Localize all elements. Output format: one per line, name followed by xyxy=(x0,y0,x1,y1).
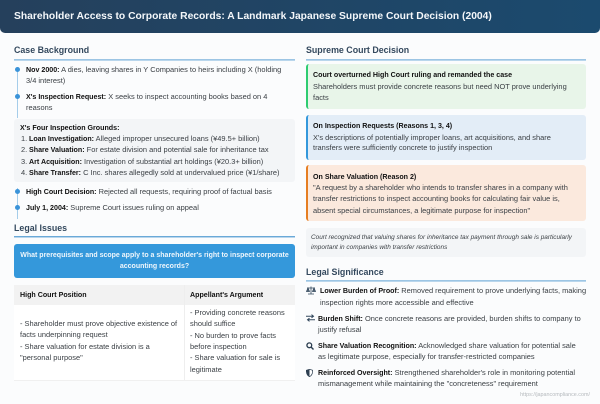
significance: burden shift: Burden Shift: Once concrete reasons are provided, burden shifts to company to xyxy=(318,314,581,322)
significance: lower burden: Lower Burden of Proof: Removed requirement to prove underlying facts, making xyxy=(320,286,586,295)
High Court position text: - Share valuation for estate division is a xyxy=(20,342,150,350)
grounds heading: X's Four Inspection Grounds: xyxy=(20,124,119,132)
ground 3: Art Acquisition: Investigation of substantial art holdings (¥20.3+ billion) xyxy=(29,156,263,166)
significance: burden shift xyxy=(318,314,581,334)
significance: share valuation recognition xyxy=(318,341,576,361)
timeline entry: Nov 2000: 3/4 interest) xyxy=(26,76,65,85)
timeline entry: inspection request xyxy=(26,92,268,112)
title banner xyxy=(0,0,600,33)
timeline entry: inspection request: X's Inspection Request: X seeks to inspect accounting books based on 4 xyxy=(26,92,267,101)
table header: High Court position: High Court Position xyxy=(20,290,87,298)
inspection grounds box xyxy=(14,119,295,182)
ground 4: Share Transfer: C Inc. shares allegedly sold at undervalued price (¥1/share) xyxy=(29,168,280,176)
title: Shareholder Access to Corporate Records: A Landmark Japanese Supreme Court Decision (2004) xyxy=(14,11,492,22)
panel: legal issues xyxy=(14,222,295,381)
green callout: ruling: Shareholders must provide concrete reasons but need NOT prove underlying xyxy=(313,82,567,90)
orange callout: share valuation xyxy=(306,165,586,221)
appellant's argument text: - No burden to prove facts xyxy=(190,330,276,340)
orange callout: share valuation: transfer restrictions to inspect accounting books for calculating fair value is, xyxy=(313,194,560,203)
icon: magnifier xyxy=(306,342,314,350)
significance: lower burden: inspection rights more accessible and effective xyxy=(320,298,474,306)
question box: accounting records? xyxy=(120,263,189,270)
timeline dot: inspection request xyxy=(14,94,20,99)
ground 2: Share Valuation: For estate division and potential sale for inheritance tax xyxy=(29,145,269,154)
orange callout: share valuation: "A request by a shareholder who intends to transfer shares in a company with xyxy=(313,183,568,192)
High Court position text: "personal purpose" xyxy=(20,353,83,362)
note: court recognition: Court recognized that valuing shares for inheritance tax payment through sale is particularly xyxy=(311,234,572,241)
green callout: ruling: Court overturned High Court ruling and remanded the case xyxy=(313,71,512,79)
High Court position text: - Shareholder must prove objective existence of xyxy=(20,319,177,328)
panel: legal significance xyxy=(306,266,586,388)
blue callout: inspection requests: On Inspection Requests (Reasons 1, 3, 4) xyxy=(313,122,452,130)
ground 3: 3. xyxy=(21,156,27,166)
significance: burden shift: justify refusal xyxy=(318,324,361,334)
orange callout: share valuation: absent special circumstances, a legitimate purpose for inspection" xyxy=(313,206,530,214)
note: court recognition xyxy=(306,228,586,257)
ground 2: 2. xyxy=(21,145,27,154)
panel: supreme court decision xyxy=(306,45,586,250)
orange callout: share valuation: On Share Valuation (Reason 2) xyxy=(313,172,416,180)
question box xyxy=(14,244,295,278)
ground 4: 4. xyxy=(21,168,27,176)
heading: case background: Case Background xyxy=(14,45,89,55)
timeline entry: Nov 2000 xyxy=(26,65,281,85)
green callout: ruling xyxy=(306,64,586,109)
comparison table xyxy=(14,285,295,381)
icon: scales xyxy=(306,286,316,294)
significance: lower burden xyxy=(320,286,586,306)
significance: reinforced oversight: mismanagement while maintaining the "concreteness" requirement xyxy=(318,379,538,388)
High Court position text xyxy=(20,319,178,362)
appellant's argument text: - Providing concrete reasons xyxy=(190,308,285,317)
panel: case background xyxy=(14,45,295,219)
appellant's argument text: before inspection xyxy=(190,342,247,351)
footer source URL: https://japancompliance.com/ xyxy=(520,392,590,398)
timeline dot: High Court xyxy=(14,188,20,194)
timeline entry: July 2004: July 1, 2004: Supreme Court issues ruling on appeal xyxy=(26,202,199,212)
timeline entry: High Court decision: High Court Decision: Rejected all requests, requiring proof of factual basis xyxy=(26,186,272,196)
ground 1: 1. xyxy=(21,134,27,143)
timeline entry: Nov 2000: Nov 2000: A dies, leaving shares in Y Companies to heirs including X (holding xyxy=(26,65,281,74)
significance: share valuation recognition: as legitimate purpose, especially for transfer-restricted companies xyxy=(318,352,535,361)
heading: supreme court decision: Supreme Court Decision xyxy=(306,45,409,55)
appellant's argument text: - Share valuation for sale is xyxy=(190,353,280,362)
blue callout: inspection requests: transfers were sufficiently concrete to justify inspection xyxy=(313,143,492,152)
icon: shield xyxy=(306,369,313,377)
timeline entry: inspection request: reasons xyxy=(26,103,52,112)
blue callout: inspection requests: X's descriptions of potentially improper loans, art acquisitions, and share xyxy=(313,132,551,142)
heading: legal significance: Legal Significance xyxy=(306,266,384,276)
timeline dot: Nov 2000 xyxy=(14,66,20,72)
significance: reinforced oversight xyxy=(318,368,575,388)
heading: legal issues: Legal Issues xyxy=(14,222,67,232)
table header: appellant's argument: Appellant's Argument xyxy=(190,290,263,298)
question box: What prerequisites and scope apply to a shareholder's right to inspect corporate xyxy=(20,252,289,258)
ground 1: Loan Investigation: Alleged improper unsecured loans (¥49.5+ billion) xyxy=(29,134,260,143)
timeline dot: July 2004 xyxy=(14,204,20,210)
note: court recognition: important in companies with transfer restrictions xyxy=(311,244,447,250)
significance: share valuation recognition: Share Valuation Recognition: Acknowledged share valuation for potential sale xyxy=(318,341,576,350)
appellant's argument text: should suffice xyxy=(190,319,235,328)
appellant's argument text: legitimate xyxy=(190,364,222,374)
significance: reinforced oversight: Reinforced Oversight: Strengthened shareholder's role in monitoring potential xyxy=(318,368,575,377)
appellant's argument text xyxy=(190,308,285,374)
green callout: ruling: facts xyxy=(313,93,329,102)
blue callout: inspection requests xyxy=(306,115,586,160)
High Court position text: facts underpinning request xyxy=(20,330,108,339)
icon: exchange arrows xyxy=(306,314,315,322)
